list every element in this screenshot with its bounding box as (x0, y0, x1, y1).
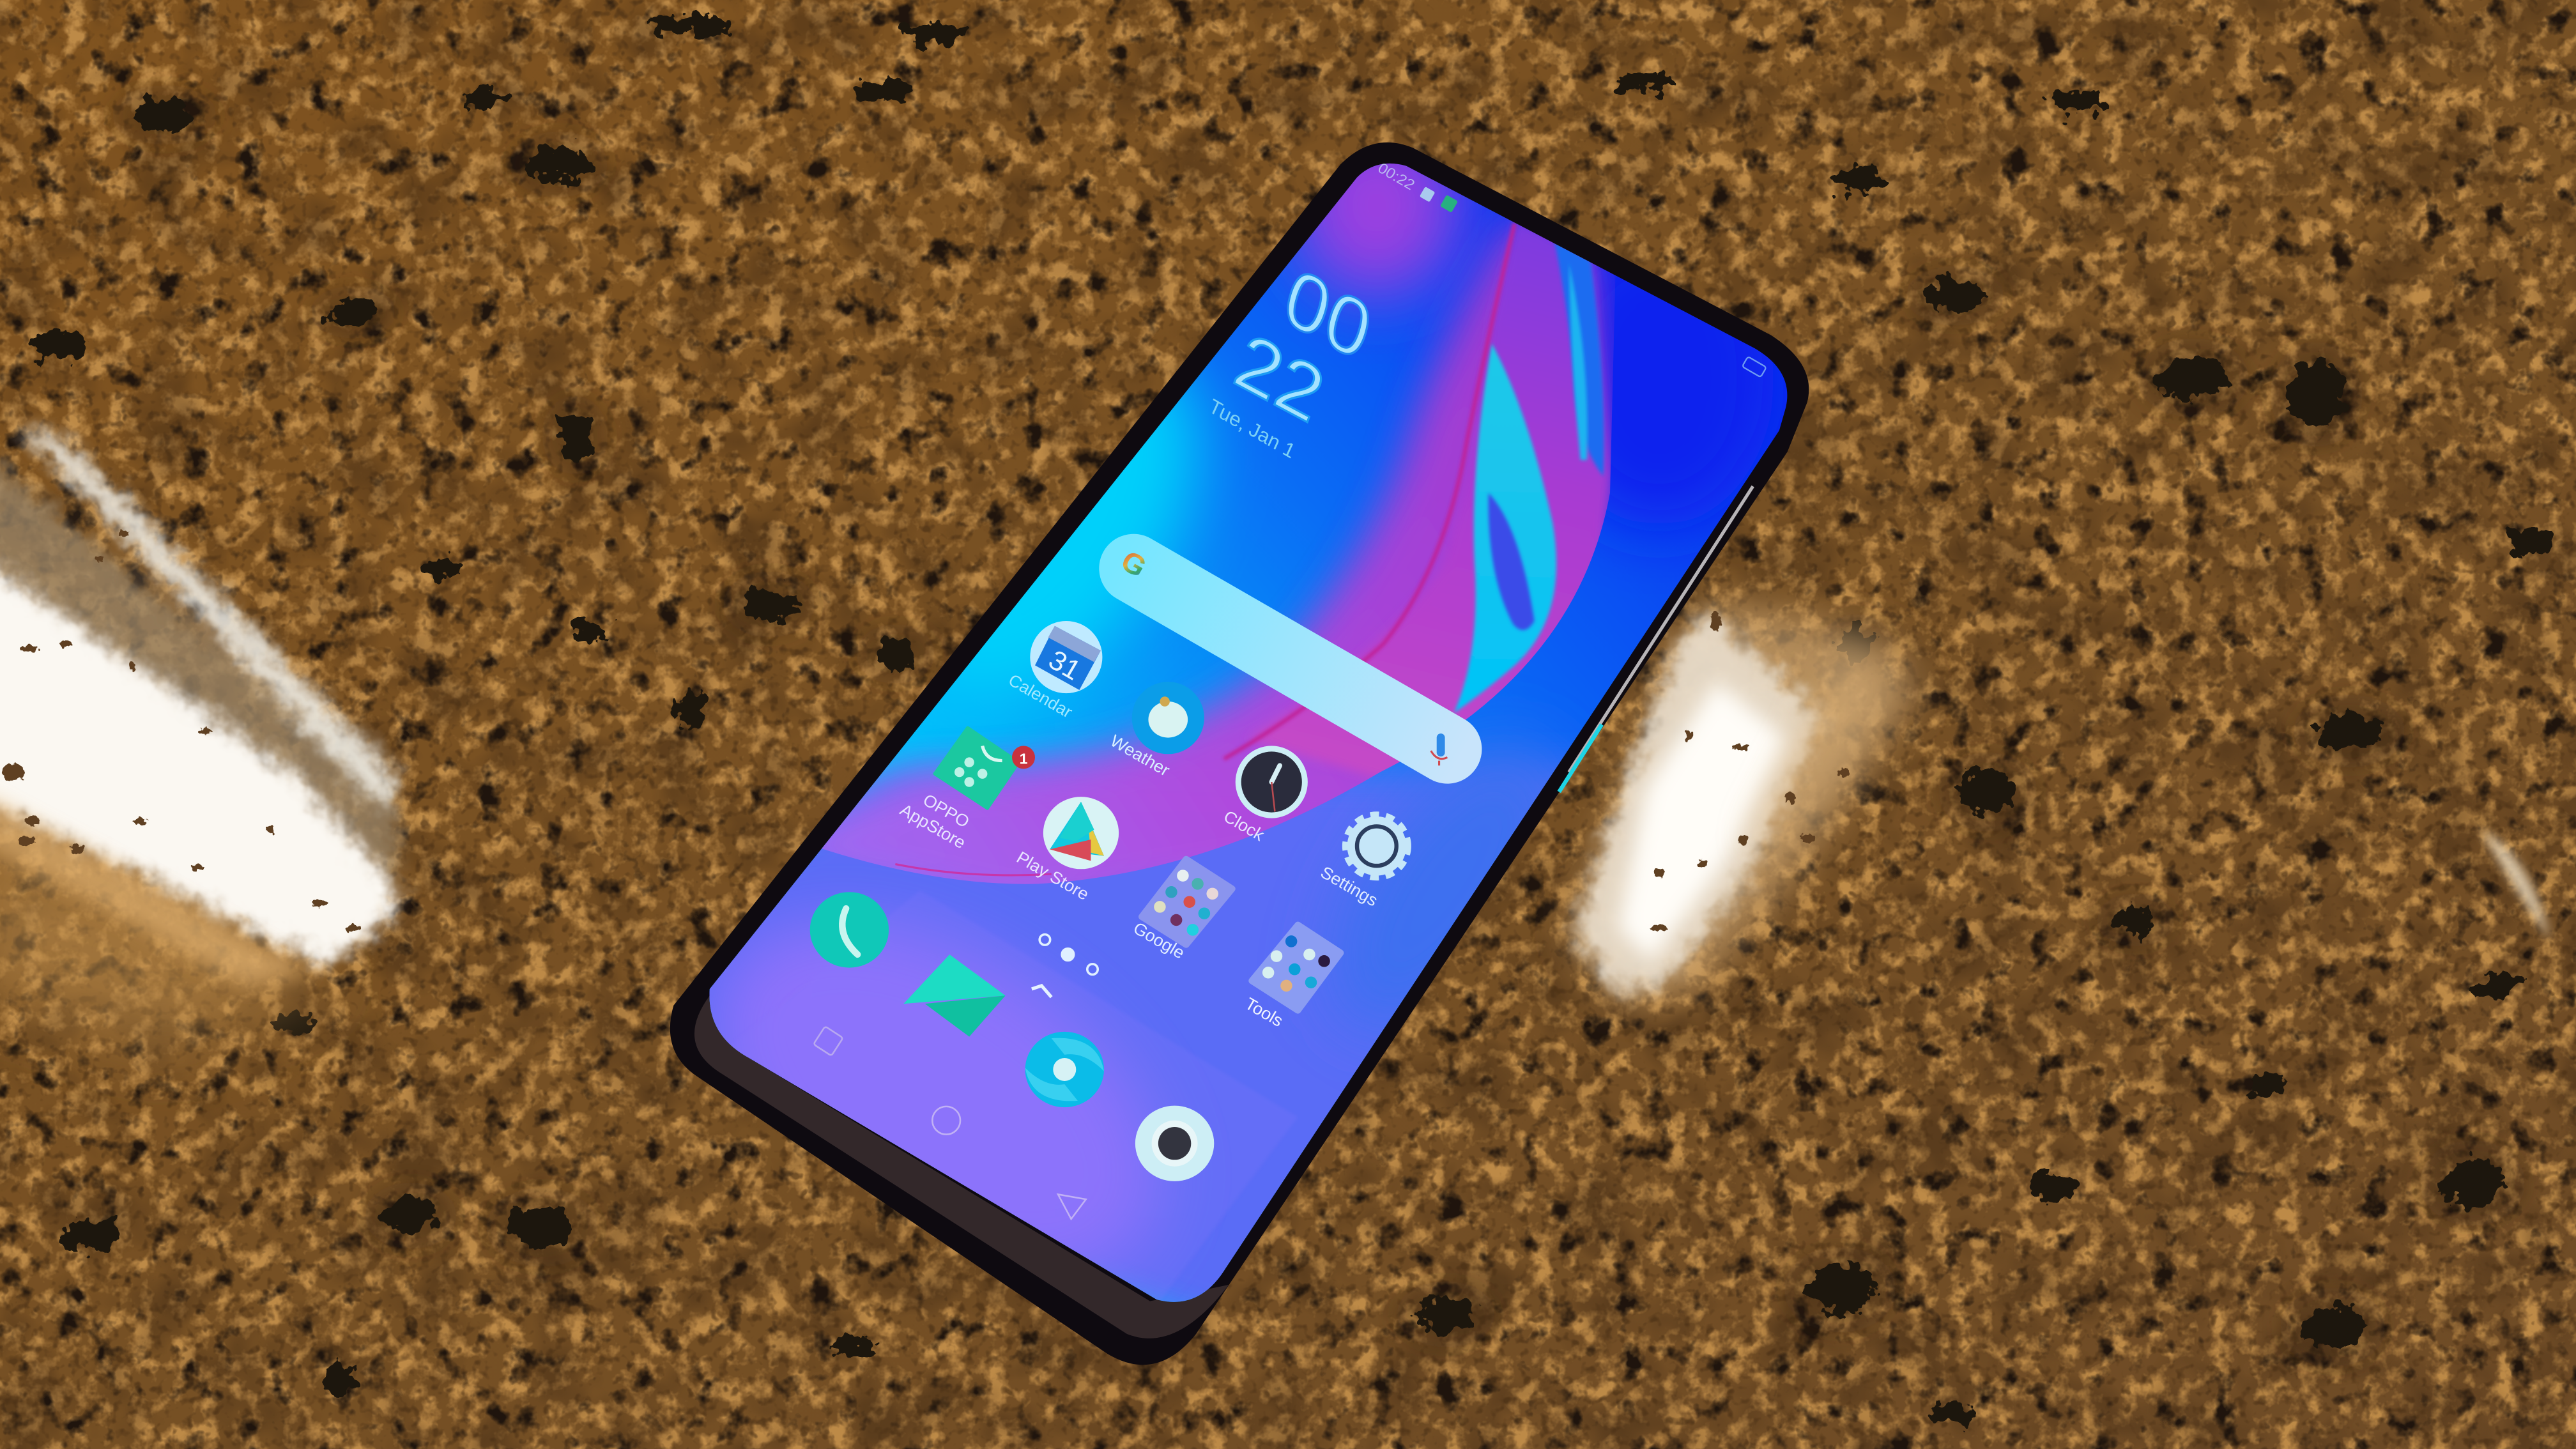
clock date: Tue, Jan 1 (1206, 394, 1299, 463)
app: weather (1132, 682, 1204, 754)
side button and edge reflection (1559, 486, 1753, 792)
battery icon (1742, 356, 1767, 377)
lower shadow band (723, 891, 1298, 1314)
wallpaper swirl (739, 220, 1610, 920)
microphone icon (1431, 738, 1447, 765)
notification badge (1012, 746, 1035, 769)
nav button: back (1058, 1194, 1086, 1219)
label: calendar: Calendar (1005, 670, 1076, 722)
app folder: tools (1252, 925, 1340, 1010)
phone screen (709, 164, 1788, 1302)
app: play store (1043, 797, 1119, 869)
app: oppo appstore: 1 (1020, 751, 1028, 767)
status bar time: 00:22 (1375, 160, 1418, 194)
label: play store: Play Store (1013, 848, 1092, 904)
nav button: recent (813, 1026, 843, 1056)
page indicator dots (1039, 935, 1098, 974)
app: oppo appstore (935, 728, 1035, 808)
label: appstore: AppStore (897, 800, 969, 852)
label: settings: Settings (1317, 862, 1381, 910)
label: google: Google (1130, 918, 1188, 963)
status bar icons (1420, 187, 1458, 213)
dock: messages (903, 954, 1006, 1037)
app: calendar (1030, 621, 1102, 693)
phone body (670, 142, 1809, 1365)
nav button: home (932, 1107, 960, 1135)
dock: browser (1025, 1032, 1104, 1107)
app: clock (1236, 746, 1308, 818)
dock: camera (1135, 1106, 1214, 1181)
label: oppo: OPPO (920, 790, 973, 832)
dock: phone (810, 892, 889, 968)
app: calendar: 31 (1043, 645, 1085, 686)
label: clock: Clock (1220, 807, 1268, 845)
clock hours: 00 (1275, 250, 1381, 378)
clock minutes: 22 (1225, 316, 1335, 440)
app: settings (1347, 816, 1406, 876)
swipe chevron (1032, 986, 1052, 997)
google g logo: G (1116, 544, 1153, 584)
label: weather: Weather (1107, 731, 1173, 780)
reflection: right window glare (1569, 600, 2550, 1002)
label: tools: Tools (1242, 994, 1286, 1031)
reflection: left window glare (0, 424, 401, 1052)
search bar (1116, 544, 1447, 765)
app folder: google (1142, 859, 1232, 945)
